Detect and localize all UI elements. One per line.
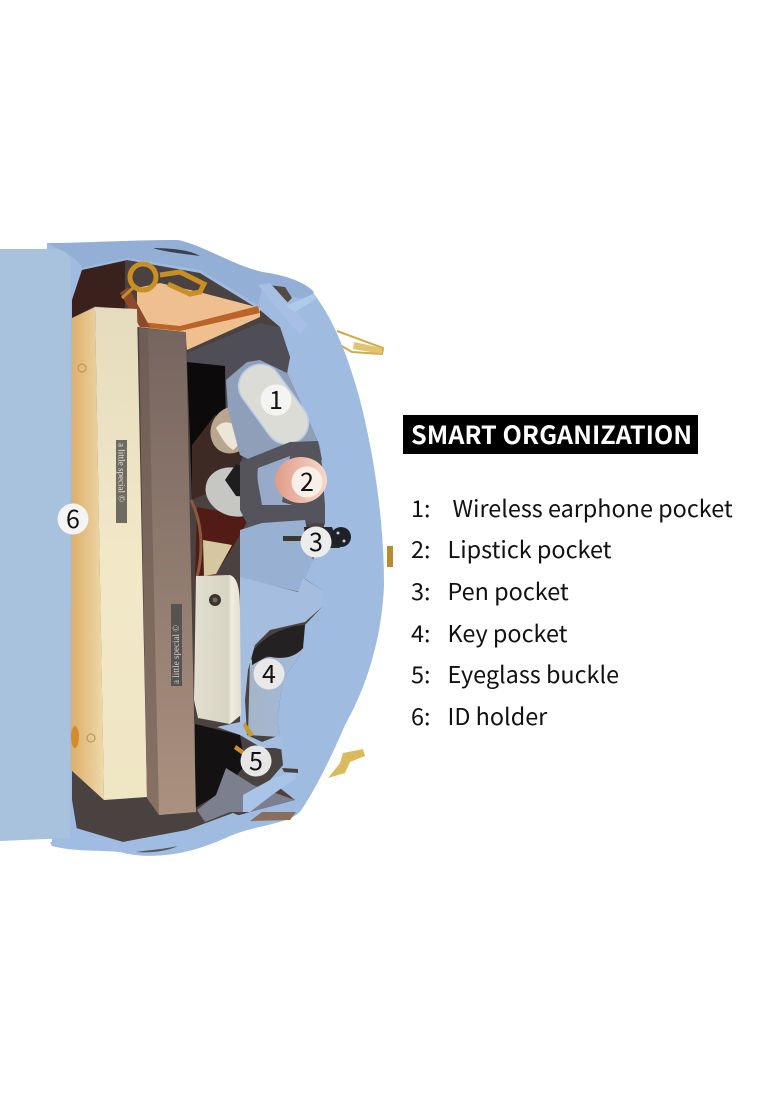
number marker 5: 5 — [249, 742, 263, 778]
front flap — [0, 249, 71, 841]
brown box: a little special © — [171, 625, 181, 684]
item 3: 3: — [411, 573, 430, 607]
number marker 4 — [254, 655, 284, 691]
item 1: 1: — [411, 490, 430, 524]
phone — [194, 575, 241, 724]
number marker 6: 6 — [66, 500, 80, 536]
pen pocket — [240, 520, 351, 592]
item 3: Pen pocket — [448, 573, 569, 607]
item 2: Lipstick pocket — [448, 531, 611, 565]
interior dark base — [72, 260, 325, 842]
eyeglass buckle hardware — [234, 722, 254, 758]
black space under phone — [195, 724, 245, 808]
top rim and slit — [47, 240, 314, 305]
feature list — [411, 490, 733, 732]
item 5: 5: — [411, 656, 430, 690]
bag outer body — [46, 240, 384, 856]
number marker 6 — [58, 500, 88, 536]
bottom rim — [50, 828, 200, 856]
item 4: 4: — [411, 615, 430, 649]
brown box — [139, 328, 196, 815]
lipstick pocket — [240, 441, 327, 530]
item 6: ID holder — [448, 698, 547, 732]
item 5: Eyeglass buckle — [448, 656, 619, 690]
brown bottle with gold cap — [192, 399, 261, 500]
number marker 3 — [300, 523, 332, 559]
number marker 2: 2 — [300, 463, 314, 499]
gold zip on side — [71, 726, 79, 748]
bag photo illustration — [0, 240, 393, 856]
gold buckle bottom right — [328, 749, 365, 778]
silver tube and nozzle — [191, 460, 269, 578]
orange leather pouch — [120, 283, 260, 350]
item 1: Wireless earphone pocket — [452, 490, 733, 524]
item 6: 6: — [411, 698, 430, 732]
key pocket panel — [217, 577, 322, 750]
number marker 1 — [260, 381, 292, 417]
number marker 2 — [292, 463, 322, 499]
number marker 3: 3 — [309, 523, 323, 559]
ID holder cream box: a little special © — [116, 443, 126, 502]
number marker 1: 1 — [269, 381, 283, 417]
bag floor and straps — [187, 768, 300, 845]
gray organizer back — [187, 323, 325, 530]
number marker 4: 4 — [262, 655, 276, 691]
strap and loop upper right — [258, 283, 316, 335]
gold clasp — [122, 264, 204, 298]
number marker 5 — [240, 742, 272, 778]
ID holder cream box — [71, 307, 147, 800]
heading: smart organization: SMART ORGANIZATION — [411, 416, 692, 452]
item 2: 2: — [411, 531, 430, 565]
item 4: Key pocket — [448, 615, 568, 649]
gold buckle top right — [337, 331, 383, 354]
gold buckle right middle — [387, 546, 393, 567]
earphone pocket — [226, 356, 322, 470]
